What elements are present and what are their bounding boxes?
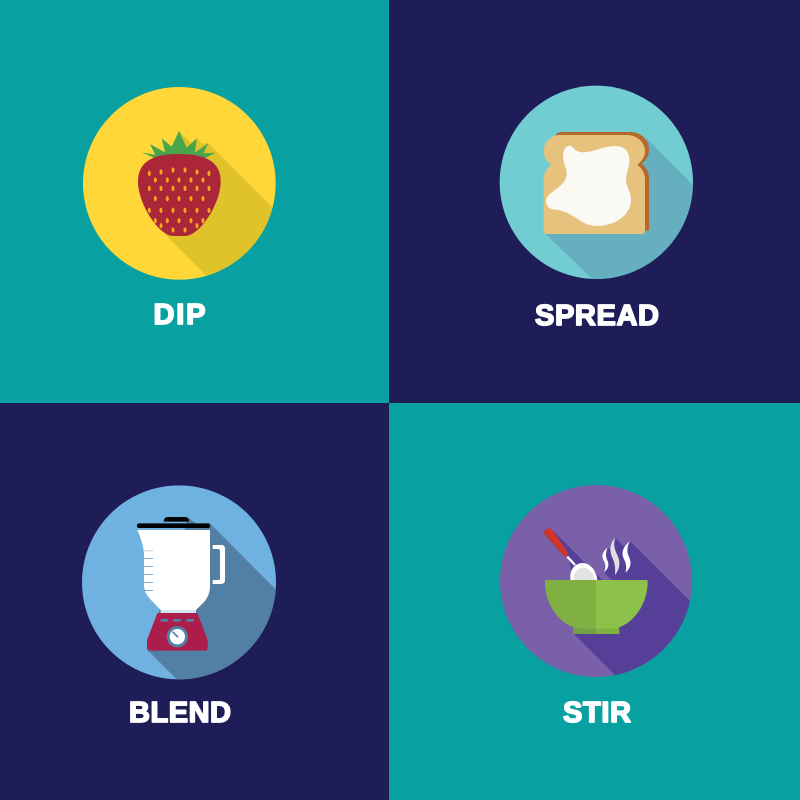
blender handle [213, 545, 225, 584]
blender collar [161, 610, 196, 613]
steam [602, 537, 631, 575]
blender lid [137, 523, 210, 528]
icon: soup bowl [500, 485, 692, 677]
spoon bowl [570, 563, 597, 580]
toast slice [544, 135, 645, 234]
panel: top left background [0, 0, 389, 403]
panel: top right background [389, 0, 800, 403]
blender dial [167, 626, 188, 647]
strawberry leaves [142, 131, 216, 159]
strawberry body [138, 154, 221, 236]
toast crust [556, 132, 649, 231]
blender jug [137, 530, 210, 610]
jug measure marks [144, 550, 153, 591]
icon: blender [82, 485, 276, 680]
heading: DIP: DIP [154, 299, 206, 331]
panel: bottom right background [389, 403, 800, 800]
heading: STIR: STIR [563, 697, 631, 729]
icon: toast with spread [500, 86, 693, 279]
bowl body [545, 580, 648, 629]
heading: BLEND: BLEND [129, 697, 231, 729]
spoon handle [544, 529, 568, 557]
panel: bottom left background [0, 403, 389, 800]
heading: SPREAD: SPREAD [535, 300, 659, 332]
bread spread [546, 146, 631, 226]
strawberry seeds [148, 167, 210, 233]
bowl foot [573, 627, 619, 634]
icon: strawberry [83, 87, 276, 280]
blender base [147, 613, 208, 651]
blender buttons [160, 619, 194, 622]
blender lid knob [164, 517, 189, 522]
